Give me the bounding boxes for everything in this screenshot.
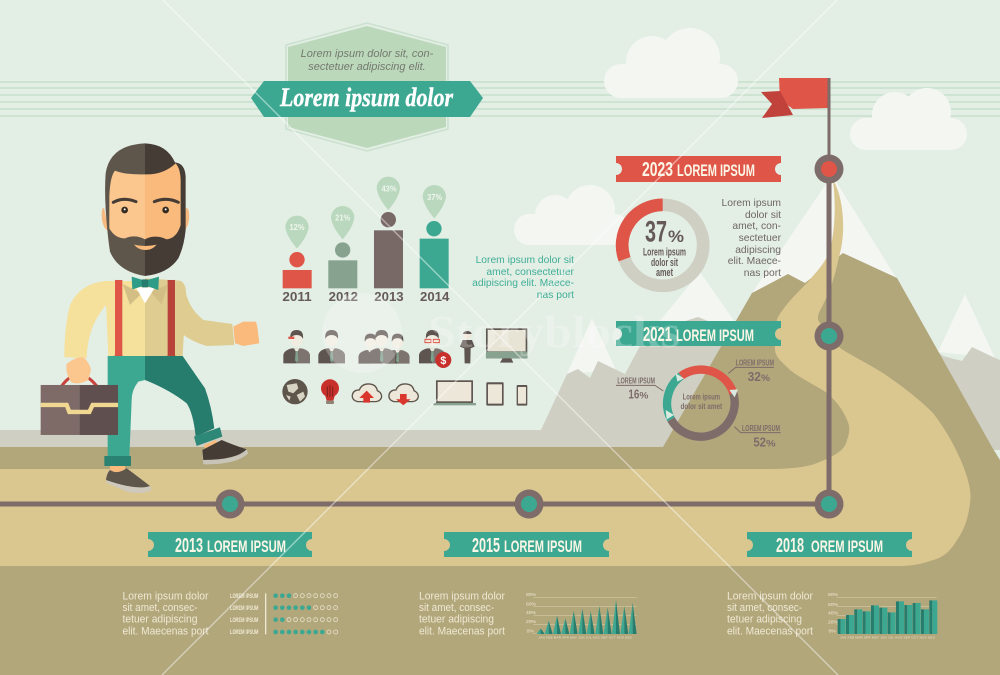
empty dots bbox=[287, 594, 338, 634]
teal text block: nas port bbox=[537, 290, 574, 301]
donut center text: Lorem ipsum bbox=[683, 392, 720, 401]
shirt bbox=[105, 281, 145, 356]
filled dots bbox=[273, 593, 325, 634]
ribbon: 2015 bbox=[444, 532, 609, 557]
teal text block: amet, consectetuer bbox=[486, 267, 575, 278]
axis labels: 40% bbox=[526, 610, 537, 616]
bottom text block 2: elit. Maecenas port bbox=[419, 625, 505, 637]
mountains background bbox=[0, 272, 1000, 450]
label 16%: 16 bbox=[628, 386, 639, 401]
icon: person with dollar: $ bbox=[440, 355, 446, 367]
watermark bbox=[162, 0, 838, 675]
axis labels: 80% bbox=[526, 592, 537, 598]
bar 2013: 2013 bbox=[374, 290, 404, 304]
bottom text block 1: Lorem ipsum dolor bbox=[122, 590, 209, 602]
face bbox=[109, 171, 145, 239]
text block 2023: adipiscing bbox=[735, 245, 781, 256]
ribbon: 2021: LOREM IPSUM bbox=[676, 326, 754, 345]
bar 2014 bbox=[420, 185, 449, 304]
donut chart 37% bbox=[622, 205, 703, 286]
icon: globe bbox=[282, 379, 308, 404]
bar 2011: 12% bbox=[289, 222, 305, 232]
axis labels: 0% bbox=[829, 628, 836, 634]
label 16%: LOREM IPSUM bbox=[617, 376, 655, 385]
cloud: right bbox=[850, 88, 967, 150]
trousers bbox=[108, 356, 145, 458]
ribbon: 2013: 2013 bbox=[175, 535, 203, 557]
main mountain bbox=[0, 175, 1000, 675]
label 52% bbox=[734, 424, 781, 450]
segment: 16% bbox=[667, 376, 681, 419]
axis labels bbox=[828, 592, 839, 634]
axis labels: 40% bbox=[828, 611, 839, 617]
donut chart 37%: amet bbox=[656, 267, 673, 279]
rating labels: LOREM IPSUM bbox=[230, 605, 259, 612]
triangle chart bbox=[526, 592, 637, 639]
ribbon: 2021 bbox=[616, 321, 781, 346]
axis labels: 20% bbox=[828, 619, 839, 625]
axis labels: 60% bbox=[828, 602, 839, 608]
dot rating chart bbox=[230, 593, 338, 636]
ribbon: 2015: LOREM IPSUM bbox=[504, 537, 582, 556]
donut chart 37%: 37 bbox=[645, 216, 667, 249]
axis labels bbox=[526, 592, 537, 634]
hexagon text: sectetuer adipiscing elit. bbox=[308, 61, 426, 73]
label 52%: % bbox=[766, 439, 776, 449]
hair and beard bbox=[105, 143, 145, 276]
watermark: Storyblocks bbox=[428, 306, 680, 357]
bow tie bbox=[132, 277, 159, 290]
timeline line bbox=[0, 169, 829, 504]
ribbon: 2023: LOREM IPSUM bbox=[677, 161, 755, 180]
bar 2013 bbox=[374, 177, 404, 304]
bottom text block 3: sit amet, consec- bbox=[727, 602, 802, 614]
icon: monitor bbox=[486, 328, 527, 363]
hexagon text: Lorem ipsum dolor sit, con- bbox=[301, 48, 434, 60]
rating labels bbox=[230, 593, 259, 636]
bottom text block 3 bbox=[727, 590, 813, 637]
bar 2012: 21% bbox=[335, 213, 350, 223]
icon: person bbox=[318, 330, 345, 363]
text block 2023: sectetuer bbox=[739, 233, 782, 244]
character: businessman with briefcase bbox=[41, 143, 259, 493]
ribbon: 2013 bbox=[148, 532, 312, 557]
ribbon: 2013: LOREM IPSUM bbox=[207, 537, 286, 556]
bar 2011 bbox=[282, 216, 312, 304]
bar 2012 bbox=[328, 206, 358, 304]
bottom text block 1: elit. Maecenas port bbox=[122, 625, 208, 637]
ankles bbox=[110, 465, 125, 475]
text block 2023: Lorem ipsum bbox=[721, 198, 781, 209]
rating labels: LOREM IPSUM bbox=[230, 593, 259, 600]
icon: phone bbox=[517, 385, 527, 406]
bottom text block 3: Lorem ipsum dolor bbox=[727, 590, 813, 602]
bottom text block 1 bbox=[122, 590, 209, 637]
bottom text block 2 bbox=[419, 590, 505, 637]
text block 2023: nas port bbox=[744, 268, 781, 279]
arms bbox=[64, 281, 106, 358]
label 16%: % bbox=[639, 390, 649, 400]
axis labels: 60% bbox=[526, 601, 537, 607]
bottom text block 2: tetuer adipiscing bbox=[419, 614, 494, 626]
mouth bbox=[134, 245, 157, 250]
month labels: JAN FEB MAR APR MAY JUN JUL AUG SEP OCT NOV DEC bbox=[840, 635, 936, 639]
cloud: middle bbox=[514, 185, 630, 245]
suspenders bbox=[115, 280, 122, 357]
ribbon: 2018: OREM IPSUM bbox=[811, 537, 883, 556]
briefcase bbox=[62, 375, 97, 386]
ribbon: 2018: 2018 bbox=[776, 535, 804, 557]
dark column sides bbox=[838, 600, 932, 634]
icon: person with dollar bbox=[419, 330, 451, 368]
icon: light bulb bbox=[321, 379, 339, 404]
left hand bbox=[66, 357, 91, 383]
title banner: Lorem ipsum dolor bbox=[279, 83, 454, 112]
label 52%: 52 bbox=[753, 435, 766, 450]
timeline nodes bbox=[216, 154, 844, 518]
eyes bbox=[121, 207, 128, 213]
icon: laptop bbox=[433, 380, 476, 405]
bar chart with pins bbox=[282, 177, 449, 304]
label 32%: LOREM IPSUM bbox=[736, 359, 774, 368]
label 16% bbox=[616, 376, 663, 401]
ribbon: 2015: 2015 bbox=[472, 535, 500, 557]
dark triangle sides bbox=[541, 600, 637, 634]
bar 2013: 43% bbox=[381, 184, 397, 194]
donut center text: dolor sit amet bbox=[680, 402, 722, 411]
text block 2023: amet, con- bbox=[732, 221, 781, 232]
icon: tablet bbox=[486, 382, 504, 406]
label 32% bbox=[728, 359, 774, 384]
icon: cloud download bbox=[389, 384, 418, 405]
ribbon: 2018 bbox=[747, 532, 912, 557]
cuffs bbox=[104, 456, 131, 466]
bottom text block 1: sit amet, consec- bbox=[122, 602, 198, 614]
icon: standing man bbox=[460, 331, 475, 363]
text block 2023: elit. Maece- bbox=[728, 256, 781, 267]
eyebrows bbox=[113, 199, 178, 202]
bar 2011: 2011 bbox=[282, 290, 312, 304]
ribbon: 2023: 2023 bbox=[642, 159, 673, 181]
segment: 52% bbox=[671, 393, 735, 437]
donut chart three segments bbox=[616, 359, 781, 450]
icon set bbox=[282, 328, 527, 406]
column chart bbox=[828, 592, 937, 639]
donut chart 37%: Lorem ipsum bbox=[643, 247, 686, 259]
teal text block: Lorem ipsum dolor sit bbox=[476, 255, 574, 266]
axis labels: 80% bbox=[828, 592, 839, 598]
label 32%: % bbox=[761, 373, 771, 383]
horizontal sky stripes bbox=[0, 82, 1000, 116]
teal text block: adipiscing elit. Maece- bbox=[472, 278, 574, 289]
bottom text block 3: tetuer adipiscing bbox=[727, 614, 802, 626]
segment: 32% bbox=[681, 370, 733, 393]
bottom text block 3: elit. Maecenas port bbox=[727, 625, 813, 637]
icon: person with headset bbox=[283, 330, 310, 363]
month labels: JAN FEB MAR APR MAY JUN JUL AUG SEP OCT NOV DEC bbox=[539, 635, 633, 639]
rating labels: LOREM IPSUM bbox=[230, 617, 259, 624]
bottom text block 1: tetuer adipiscing bbox=[122, 614, 198, 626]
hands bbox=[233, 322, 259, 346]
winding road bbox=[0, 180, 971, 566]
bar 2014: 2014 bbox=[420, 290, 449, 304]
rating labels: LOREM IPSUM bbox=[230, 629, 259, 636]
flag bbox=[761, 78, 829, 169]
axis labels: 20% bbox=[526, 619, 537, 625]
icon: cloud upload bbox=[352, 384, 382, 403]
bar 2012: 2012 bbox=[329, 290, 358, 304]
title banner bbox=[251, 81, 483, 117]
light triangle sides bbox=[537, 600, 633, 634]
title hexagon bbox=[286, 23, 448, 151]
label 52%: LOREM IPSUM bbox=[742, 424, 780, 433]
ribbon: 2021: 2021 bbox=[643, 324, 672, 346]
label 32%: 32 bbox=[748, 369, 761, 384]
donut chart 37%: dolor sit bbox=[651, 257, 678, 269]
donut chart 37%: % bbox=[668, 227, 684, 246]
donut center text bbox=[680, 392, 722, 411]
axis labels: 0% bbox=[527, 628, 534, 634]
clouds bbox=[514, 28, 967, 245]
shoes bbox=[106, 468, 151, 493]
icon: team bbox=[358, 330, 410, 364]
ears bbox=[102, 208, 189, 231]
bottom text block 2: sit amet, consec- bbox=[419, 602, 494, 614]
bottom text block 2: Lorem ipsum dolor bbox=[419, 590, 505, 602]
ribbon: 2023 bbox=[616, 156, 781, 182]
light column sides bbox=[841, 600, 937, 634]
text block 2023: dolor sit bbox=[745, 210, 781, 221]
cloud: top bbox=[604, 28, 738, 98]
bar 2014: 37% bbox=[427, 192, 442, 202]
